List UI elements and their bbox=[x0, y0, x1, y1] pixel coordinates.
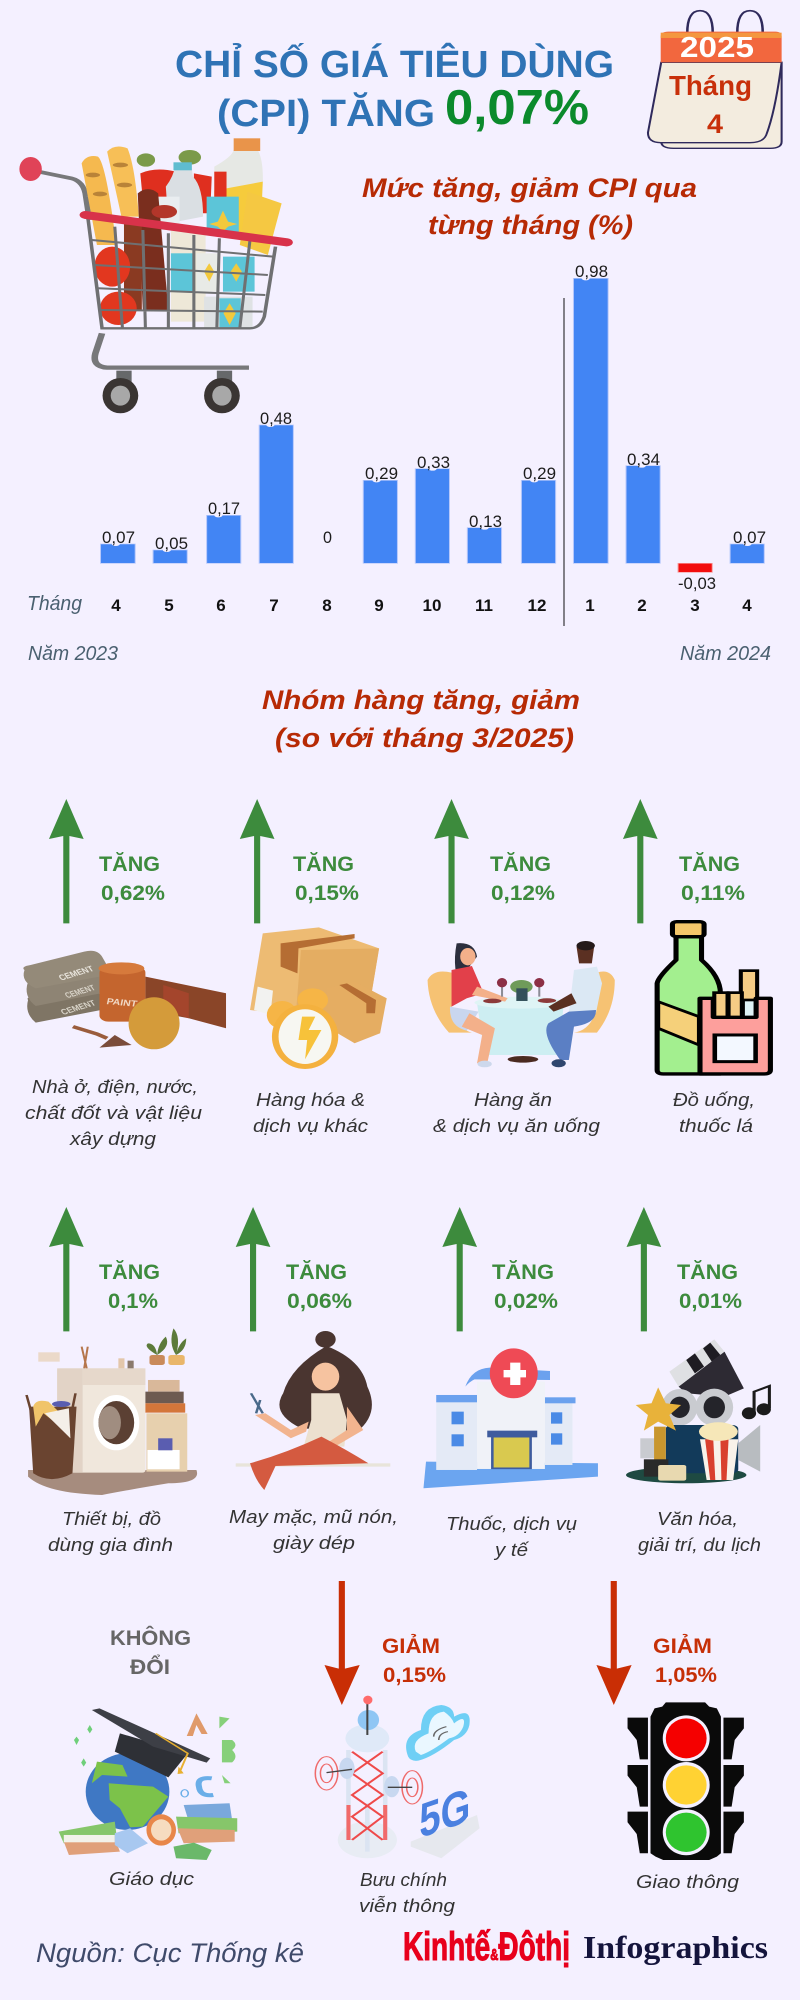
icon: cement and paint bbox=[23, 951, 226, 1049]
value: down 0.15 bbox=[382, 1635, 446, 1687]
panel: transport bbox=[596, 1581, 744, 1892]
value: up 0.15: 0,15% bbox=[295, 882, 359, 905]
value: up 0.1: TĂNG bbox=[99, 1261, 160, 1284]
label: giày dép bbox=[273, 1533, 355, 1553]
icon: cinema bbox=[626, 1339, 771, 1483]
label bbox=[48, 1509, 173, 1555]
label bbox=[229, 1507, 398, 1553]
value: up 0.12 bbox=[490, 853, 555, 905]
icon: woman sewing bbox=[236, 1331, 390, 1490]
value: up 0.02 bbox=[492, 1261, 558, 1313]
bar chart: monthly CPI: 4 bbox=[742, 596, 752, 615]
label bbox=[446, 1514, 577, 1560]
label: y tế bbox=[493, 1540, 530, 1560]
icon: cement and paint: PAINT bbox=[106, 997, 138, 1009]
label: May mặc, mũ nón, bbox=[229, 1507, 398, 1527]
bar chart: monthly CPI: Năm 2023 bbox=[28, 643, 118, 665]
icon: bottle and cigarettes bbox=[657, 922, 770, 1074]
heading: product groups: (so với tháng 3/2025) bbox=[275, 723, 574, 753]
label: & dịch vụ ăn uống bbox=[433, 1116, 600, 1136]
title: CHỈ SỐ GIÁ TIÊU DÙNG bbox=[175, 41, 614, 86]
bar chart: monthly CPI: 0,48 bbox=[260, 409, 292, 428]
heading: monthly CPI: từng tháng (%) bbox=[428, 210, 633, 240]
bar chart: monthly CPI: -0,03 bbox=[678, 574, 716, 593]
value: up 0.12: TĂNG bbox=[490, 853, 551, 876]
value: up 0.11: 0,11% bbox=[681, 882, 745, 905]
bar chart: monthly CPI: 0 bbox=[323, 528, 332, 547]
icon: cement and paint: CEMENT bbox=[63, 984, 98, 1000]
value: unchanged: ĐỔI bbox=[130, 1655, 170, 1679]
bar chart: monthly CPI: 0,07 bbox=[733, 528, 766, 547]
bar chart: monthly CPI: 6 bbox=[216, 596, 226, 615]
value: unchanged: KHÔNG bbox=[110, 1626, 191, 1650]
bar chart: monthly CPI: 1 bbox=[585, 596, 595, 615]
value: up 0.06: TĂNG bbox=[286, 1261, 347, 1284]
value: up 0.02: 0,02% bbox=[494, 1290, 558, 1313]
heading: monthly CPI bbox=[362, 173, 697, 240]
icon: washing machine bbox=[27, 1328, 197, 1495]
bar chart: monthly CPI: 7 bbox=[269, 596, 279, 615]
value: up 0.06 bbox=[286, 1261, 352, 1313]
label: viễn thông bbox=[359, 1896, 455, 1916]
icon: 5G tower: 5G bbox=[419, 1777, 470, 1849]
label: Bưu chính bbox=[360, 1870, 447, 1890]
bar chart: monthly CPI: 0,33 bbox=[417, 453, 450, 472]
bar chart: monthly CPI: 0,29 bbox=[523, 464, 556, 483]
value: down 0.15: GIẢM bbox=[382, 1635, 440, 1658]
icon: calendar bbox=[648, 11, 782, 148]
value: unchanged bbox=[110, 1626, 191, 1679]
bar chart: monthly CPI: 0,98 bbox=[575, 262, 608, 281]
label: Thiết bị, đồ bbox=[62, 1509, 161, 1529]
bar chart: monthly CPI: 0,05 bbox=[155, 534, 188, 553]
label: thuốc lá bbox=[679, 1116, 753, 1136]
value: up 0.62: 0,62% bbox=[101, 882, 165, 905]
label: Đồ uống, bbox=[673, 1090, 755, 1110]
value: down 1.05: GIẢM bbox=[653, 1635, 712, 1658]
arrow: down bbox=[596, 1581, 632, 1705]
icon: globe and graduation cap bbox=[59, 1708, 237, 1860]
value: up 0.02: TĂNG bbox=[492, 1261, 554, 1284]
bar chart: monthly CPI: Năm 2024 bbox=[680, 643, 771, 665]
icon: calendar: 4 bbox=[707, 109, 723, 139]
value: up 0.11: TĂNG bbox=[679, 853, 740, 876]
panel: household appliances bbox=[27, 1207, 197, 1555]
value: up 0.1: 0,1% bbox=[108, 1290, 158, 1313]
panel: housing and building materials bbox=[23, 799, 226, 1149]
label: Thuốc, dịch vụ bbox=[446, 1514, 577, 1534]
icon: cement and paint: CEMENT bbox=[59, 999, 99, 1017]
title: (CPI) TĂNG bbox=[217, 91, 435, 135]
icon: traffic light bbox=[628, 1702, 744, 1860]
value: down 1.05 bbox=[653, 1635, 717, 1687]
panel: beverages and tobacco bbox=[623, 799, 770, 1136]
icon: boxes and clock bbox=[250, 927, 387, 1069]
bar chart: monthly CPI: 0,13 bbox=[469, 512, 502, 531]
arrow: up bbox=[627, 1207, 661, 1331]
label: Nhà ở, điện, nước, bbox=[32, 1077, 198, 1097]
label: Văn hóa, bbox=[657, 1509, 738, 1529]
value: up 0.15 bbox=[293, 853, 359, 905]
bar chart: monthly CPI: Tháng bbox=[27, 593, 82, 615]
arrow: up bbox=[236, 1207, 270, 1331]
heading: product groups bbox=[262, 685, 580, 753]
label bbox=[25, 1077, 202, 1149]
label: Giao thông bbox=[636, 1872, 739, 1892]
panel: clothing bbox=[229, 1207, 398, 1553]
bar chart: monthly CPI: 4 bbox=[111, 596, 121, 615]
source: Nguồn: Cục Thống kê bbox=[36, 1938, 304, 1968]
label: dùng gia đình bbox=[48, 1535, 173, 1555]
label bbox=[253, 1090, 368, 1136]
value: up 0.01 bbox=[677, 1261, 742, 1313]
bar chart: monthly CPI: 8 bbox=[322, 596, 332, 615]
bar chart: monthly CPI: 10 bbox=[423, 596, 441, 615]
icon: 5G tower bbox=[315, 1696, 480, 1858]
value: up 0.62: TĂNG bbox=[99, 853, 160, 876]
arrow: up bbox=[49, 799, 84, 923]
label: Hàng ăn bbox=[474, 1090, 552, 1110]
arrow: up bbox=[240, 799, 274, 923]
value: up 0.15: TĂNG bbox=[293, 853, 354, 876]
icon: cement and paint: CEMENT bbox=[57, 965, 97, 983]
logo: Kinh te Do thi Infographics bbox=[403, 1925, 768, 1969]
label bbox=[673, 1090, 755, 1136]
title bbox=[175, 41, 614, 135]
value: up 0.06: 0,06% bbox=[287, 1290, 352, 1313]
panel: food services bbox=[428, 799, 615, 1136]
label: Hàng hóa & bbox=[256, 1090, 365, 1110]
label: dịch vụ khác bbox=[253, 1116, 368, 1136]
icon: hospital bbox=[423, 1348, 598, 1488]
heading: product groups: Nhóm hàng tăng, giảm bbox=[262, 685, 580, 715]
label: giải trí, du lịch bbox=[638, 1535, 761, 1555]
panel: post and telecom bbox=[315, 1581, 480, 1916]
icon: calendar: 2025 bbox=[680, 32, 754, 64]
value: up 0.01: 0,01% bbox=[679, 1290, 742, 1313]
logo: Kinh te Do thi Infographics: Kinhtế&Đôthị bbox=[403, 1925, 570, 1969]
bar chart: monthly CPI: 9 bbox=[374, 596, 384, 615]
icon: calendar: Tháng bbox=[669, 70, 752, 101]
heading: monthly CPI: Mức tăng, giảm CPI qua bbox=[362, 173, 697, 203]
label bbox=[433, 1090, 600, 1136]
logo: Kinh te Do thi Infographics: Infographics bbox=[583, 1929, 768, 1965]
panel: health bbox=[423, 1207, 598, 1560]
bar chart: monthly CPI: 11 bbox=[475, 596, 493, 615]
panel: other goods and services bbox=[240, 799, 387, 1136]
arrow: down bbox=[324, 1581, 360, 1705]
icon: shopping cart with groceries bbox=[19, 138, 287, 413]
panel: education bbox=[59, 1626, 237, 1889]
bar chart: monthly CPI: 5 bbox=[164, 596, 174, 615]
arrow: up bbox=[442, 1207, 477, 1331]
label: Giáo dục bbox=[109, 1869, 194, 1889]
label: chất đốt và vật liệu bbox=[25, 1103, 202, 1123]
label bbox=[359, 1870, 455, 1916]
value: up 0.62 bbox=[99, 853, 165, 905]
value: down 1.05: 1,05% bbox=[655, 1664, 717, 1687]
bar chart: monthly CPI: 0,34 bbox=[627, 450, 660, 469]
bar chart: monthly CPI: 12 bbox=[528, 596, 546, 615]
bar chart: monthly CPI: 0,07 bbox=[102, 528, 135, 547]
value: up 0.11 bbox=[679, 853, 745, 905]
label bbox=[638, 1509, 761, 1555]
bar chart: monthly CPI bbox=[27, 262, 771, 665]
label: xây dựng bbox=[69, 1129, 156, 1149]
value: up 0.01: TĂNG bbox=[677, 1261, 738, 1284]
value: up 0.1 bbox=[99, 1261, 160, 1313]
arrow: up bbox=[434, 799, 469, 923]
bar chart: monthly CPI: 2 bbox=[637, 596, 647, 615]
value: up 0.12: 0,12% bbox=[491, 882, 555, 905]
title: 0,07% bbox=[445, 81, 589, 135]
bar chart: monthly CPI: 3 bbox=[690, 596, 700, 615]
arrow: up bbox=[49, 1207, 84, 1331]
value: down 0.15: 0,15% bbox=[383, 1664, 446, 1687]
bar chart: monthly CPI: 0,29 bbox=[365, 464, 398, 483]
panel: culture and entertainment bbox=[626, 1207, 771, 1555]
bar chart: monthly CPI: 0,17 bbox=[208, 499, 240, 518]
icon: couple dining bbox=[428, 941, 615, 1067]
arrow: up bbox=[623, 799, 658, 923]
